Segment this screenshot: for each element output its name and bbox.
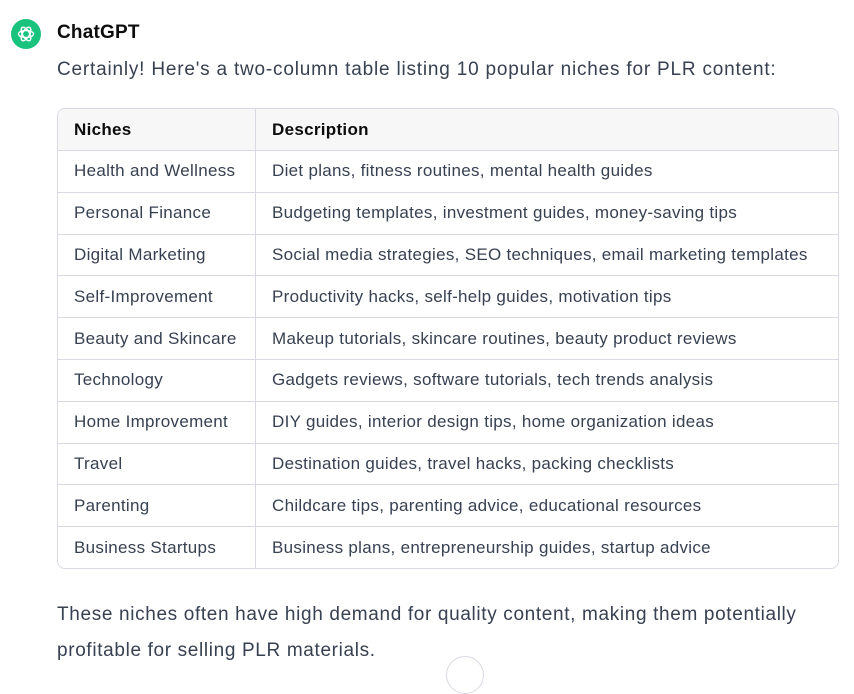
closing paragraph: These niches often have high demand for quality content, making them potentially xyxy=(57,604,797,625)
table panel: Beauty and Skincare xyxy=(74,329,237,348)
closing paragraph xyxy=(57,604,797,661)
table panel: Home Improvement xyxy=(74,412,228,431)
table panel: Business Startups xyxy=(74,538,216,557)
table panel: Self-Improvement xyxy=(74,287,213,306)
table panel: Productivity hacks, self-help guides, motivation tips xyxy=(272,287,672,306)
table panel: Health and Wellness xyxy=(74,161,235,180)
table panel: Social media strategies, SEO techniques, email marketing templates xyxy=(272,245,808,264)
table panel: Diet plans, fitness routines, mental health guides xyxy=(272,161,653,180)
table panel: Gadgets reviews, software tutorials, tech trends analysis xyxy=(272,370,713,389)
table panel: Makeup tutorials, skincare routines, beauty product reviews xyxy=(272,329,737,348)
table panel: Niches xyxy=(74,120,132,138)
table panel: Description xyxy=(272,120,369,138)
intro text: Certainly! Here's a two-column table listing 10 popular niches for PLR content: xyxy=(57,59,776,80)
closing paragraph: profitable for selling PLR materials. xyxy=(57,640,376,661)
table panel: Personal Finance xyxy=(74,203,211,222)
table panel: Travel xyxy=(74,454,122,473)
table panel: Digital Marketing xyxy=(74,245,206,264)
table panel: Parenting xyxy=(74,496,149,515)
table panel: Budgeting templates, investment guides, money-saving tips xyxy=(272,203,737,222)
table panel xyxy=(57,108,839,569)
heading: ChatGPT: ChatGPT xyxy=(57,22,140,43)
table panel: Destination guides, travel hacks, packing checklists xyxy=(272,454,674,473)
table panel: Childcare tips, parenting advice, educational resources xyxy=(272,496,701,515)
table panel: DIY guides, interior design tips, home organization ideas xyxy=(272,412,714,431)
scroll button xyxy=(446,656,484,694)
table panel: Technology xyxy=(74,370,163,389)
table panel: Business plans, entrepreneurship guides, startup advice xyxy=(272,538,711,557)
icon: ChatGPT logo xyxy=(11,19,41,49)
